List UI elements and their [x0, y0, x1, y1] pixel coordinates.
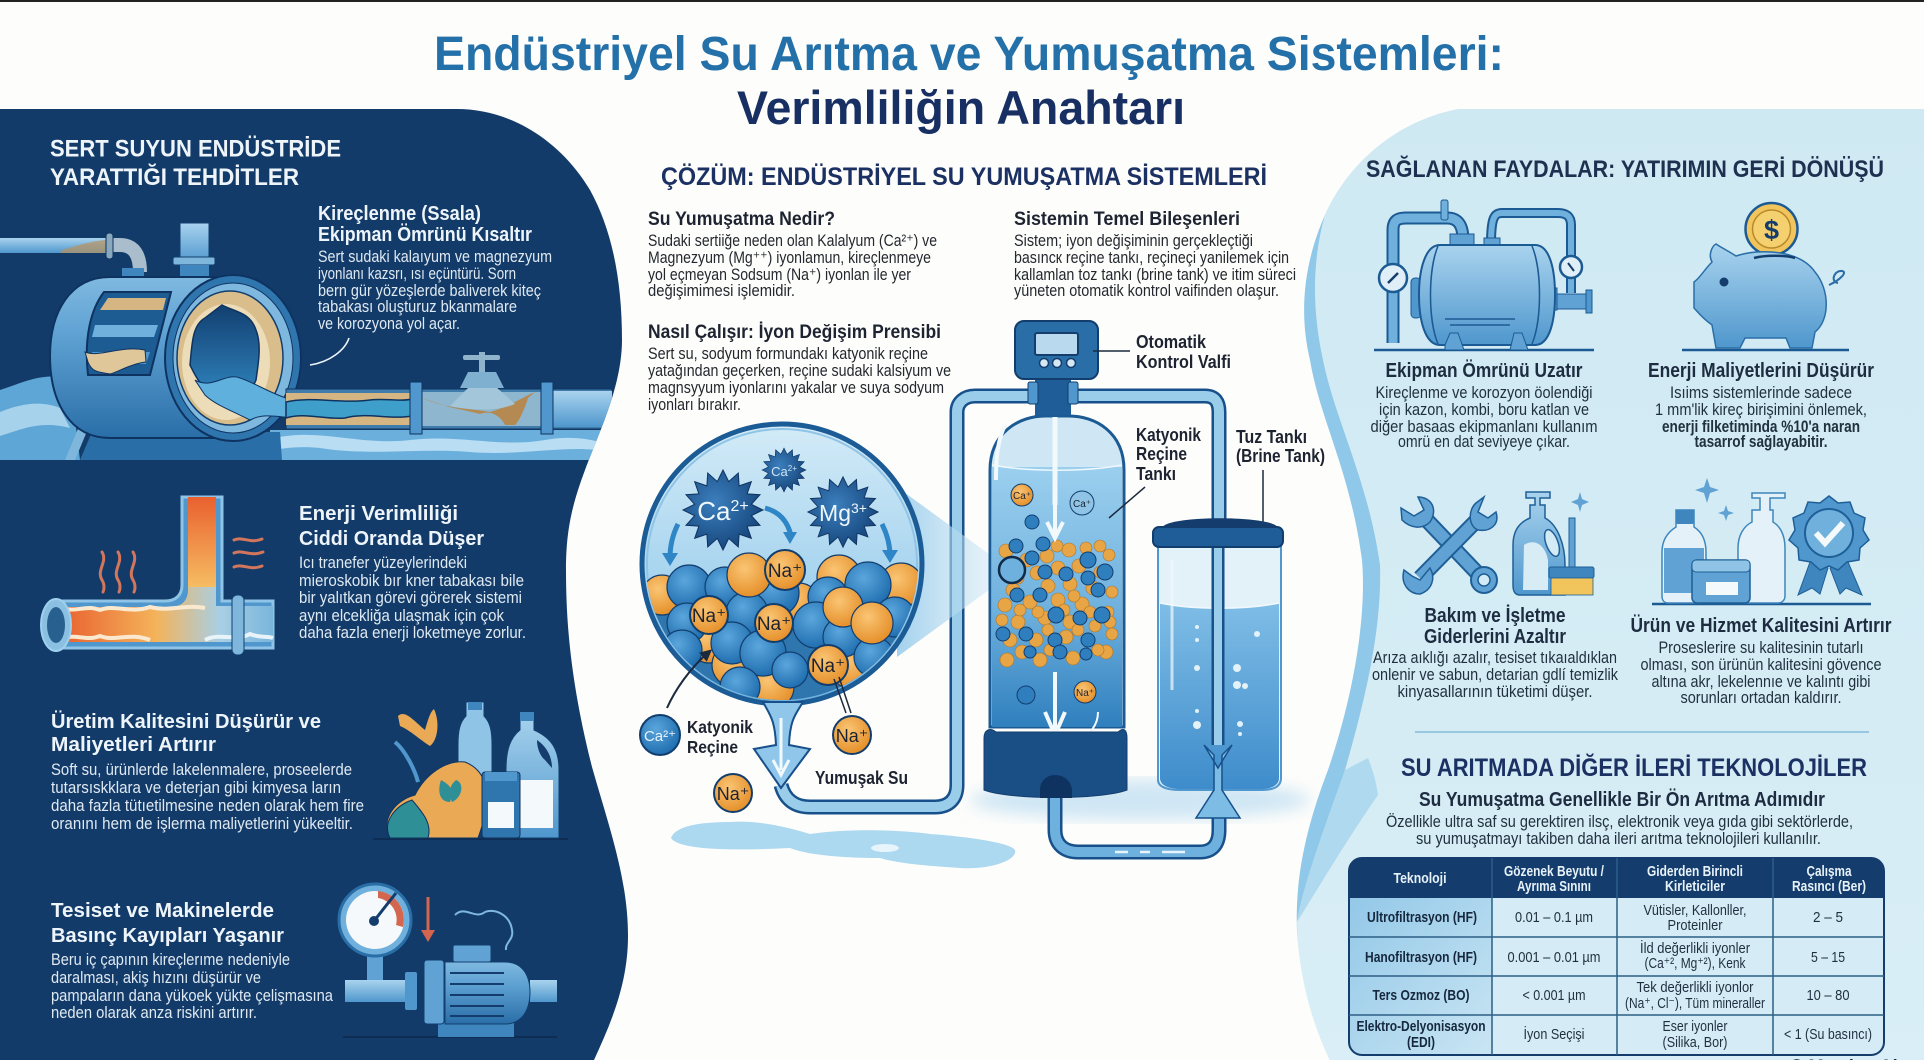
- benefit 3 text: Giderlerini Azaltır: [1424, 626, 1566, 648]
- table rows: (Na⁺, Cl⁻), Tüm mineraller: [1625, 995, 1765, 1012]
- magnifier cone: [897, 487, 993, 657]
- softener tank: Ca⁺: [1013, 491, 1031, 502]
- label: resin tank: [1109, 424, 1202, 518]
- title: [434, 28, 1504, 134]
- benefit 1 text: Kireçlenme ve korozyon öolendiği: [1376, 384, 1592, 402]
- table header: Kirleticiler: [1665, 879, 1725, 895]
- label: resin tank: Reçine: [1136, 443, 1187, 464]
- text block: what is softening: Su Yumuşatma Nedir?: [648, 209, 835, 230]
- lens: ion exchange close-up: Na⁺: [757, 614, 791, 635]
- panel: solution heading: ÇÖZÜM: ENDÜSTRİYEL SU YUMUŞATMA SİSTEMLERİ: [661, 162, 1267, 191]
- flow arrows in lens: [670, 508, 890, 558]
- text block: system components: yüneten otomatik kontrol vaifinden olaşur.: [1014, 282, 1279, 300]
- threat 1: scale: iyonlanı kazsrı, ısı eçüntürü. Sorn: [318, 265, 516, 283]
- icon: bottles and residue: [373, 702, 568, 839]
- threat 4: pressure: Beru iç çapının kireçlerıme nedeniyle: [51, 951, 290, 969]
- icon: piggy bank: $: [1764, 215, 1779, 245]
- ion: Ca2+: [683, 470, 763, 550]
- threat 1: scale: tabakası oluşturuz bkanmalare: [318, 298, 517, 316]
- text block: how it works: iyonları bırakır.: [648, 396, 741, 414]
- table rows: Ultrofiltrasyon (HF): [1367, 909, 1477, 926]
- ion: Mg3+: [808, 477, 878, 547]
- threat 2: energy: daha fazla enerji loketmeye zorlur.: [299, 624, 526, 642]
- funnel arrow: soft water outlet: [754, 702, 810, 788]
- benefit 4 text: Ürün ve Hizmet Kalitesini Artırır: [1630, 614, 1892, 637]
- benefit 4 text: Proseslerire su kalitesinin tutarlı: [1658, 639, 1864, 657]
- brine tank: [1153, 518, 1283, 818]
- text block: how it works: [648, 322, 951, 414]
- threat 2: energy: aynı elcekliğa ulaşmak için çok: [299, 607, 505, 625]
- table rows: İyon Seçişi: [1524, 1025, 1584, 1043]
- table header: [1394, 864, 1866, 895]
- threat 3: quality: Maliyetleri Artırır: [51, 734, 216, 756]
- benefit 2 text: [1648, 360, 1874, 451]
- threat 3: quality: tutarsıskklara ve deterjan gibi kimyesa ların: [51, 779, 341, 797]
- benefit 3 text: Bakım ve İşletme: [1424, 604, 1566, 627]
- table rows: 0.01 – 0.1 µm: [1515, 909, 1593, 926]
- benefit 4 text: altına akr, lekelennıe ve kalıntı gibi: [1652, 673, 1870, 691]
- text block: what is softening: değişimimesi işlemidir.: [648, 282, 795, 300]
- label: brine tank: Tuz Tankı: [1236, 426, 1307, 447]
- other technologies heading: su yumuşatmayı takiben daha ileri arıtma teknolojileri kullanılır.: [1416, 829, 1821, 848]
- table rows: (EDI): [1407, 1034, 1435, 1051]
- softener tank: Ca⁺: [1073, 499, 1091, 510]
- benefit 1 text: Ekipman Ömrünü Uzatır: [1386, 359, 1583, 382]
- table rows: 10 – 80: [1806, 987, 1850, 1004]
- callout: cationic resin: [640, 652, 753, 757]
- threat 2: energy: [299, 503, 526, 642]
- table header: Teknoloji: [1394, 871, 1446, 887]
- icon: pressure gauge and pump: [339, 884, 557, 1037]
- text block: system components: basıncк reçine tankı, reçineçi yanilemek için: [1014, 249, 1289, 267]
- benefit 1 text: için kazon, kombi, boru katlan ve: [1379, 401, 1589, 419]
- floor puddle: [671, 822, 1015, 868]
- icon: boiler tank: [1374, 200, 1594, 350]
- panel heading: threats: [50, 136, 341, 191]
- panel: benefits: [1297, 109, 1924, 1060]
- benefit 3 text: onlenir ve sabun, detarian gdlí temizlik: [1372, 666, 1619, 684]
- threat 1: scale: bern gür yözeşlerde baliverek kiteç: [318, 282, 541, 300]
- ion: small Ca2+: Ca: [771, 464, 788, 479]
- table rows: Hanofiltrasyon (HF): [1365, 949, 1477, 966]
- table rows: Proteinler: [1668, 917, 1722, 934]
- text block: what is softening: yol eçmeyan Sodsum (Na⁺) iyonlan ile yer: [648, 266, 911, 284]
- lens: ion exchange close-up: Na⁺: [768, 561, 802, 582]
- benefit 3 text: kinyasallarının tüketimi düşer.: [1398, 683, 1592, 701]
- label: soft water: Yumuşak Su: [815, 768, 908, 788]
- table rows: < 0.001 µm: [1522, 987, 1586, 1004]
- threat 4: pressure: Basınç Kayıpları Yaşanır: [51, 925, 284, 947]
- threat 4: pressure: neden olarak anza riskini artırır.: [51, 1004, 257, 1022]
- label: control valve: Otomatik: [1136, 331, 1207, 352]
- text block: system components: kallamlan toz tankı (brine tank) ve itim süreci: [1014, 266, 1296, 284]
- label: brine tank: (Brine Tank): [1236, 445, 1325, 466]
- threat 4: pressure: [51, 900, 334, 1022]
- title: Endüstriyel Su Arıtma ve Yumuşatma Sistemleri:: [434, 28, 1504, 81]
- illustration: heated pipe with scale: [41, 497, 273, 655]
- text block: how it works: Sert su, sodyum formundakı katyonik reçine: [648, 345, 928, 363]
- threat 1: scale: [318, 203, 552, 333]
- text block: what is softening: Sudaki sertiiğe neden olan Kalalyum (Ca²⁺) ve: [648, 232, 937, 250]
- table rows: İld değerlikli iyonler: [1640, 939, 1750, 957]
- benefit 1 text: [1370, 359, 1598, 451]
- ion: free sodium: [714, 774, 752, 812]
- callout: released sodium: [833, 677, 871, 754]
- benefit 3 text: [1372, 604, 1619, 701]
- threat 4: pressure: pampaların dana yükoek yükte çelişmasına: [51, 987, 334, 1005]
- threat 1: scale: Sert sudaki kalaıyum ve magnezyum: [318, 248, 552, 266]
- threat 4: pressure: Tesiset ve Makinelerde: [51, 900, 274, 922]
- control valve head: [1015, 321, 1098, 417]
- threat 1: scale: ve korozyona yol açar.: [318, 315, 460, 333]
- table header: Gözenek Beyutu /: [1504, 864, 1604, 880]
- ion: Ca2+: Ca: [697, 496, 730, 526]
- icon: products and quality rosette: [1652, 478, 1871, 604]
- label: resin tank: Katyonik: [1136, 424, 1202, 445]
- floor mist under tanks: [970, 780, 1310, 820]
- lens: ion exchange close-up: [640, 424, 925, 710]
- table header: Ayrıma Sınını: [1517, 879, 1591, 895]
- table rows: < 1 (Su basıncı): [1784, 1026, 1872, 1043]
- benefit 4 text: olması, son ürünün kalitesini gövence: [1640, 656, 1882, 674]
- panel heading: threats: YARATTIĞI TEHDİTLER: [50, 163, 299, 191]
- text block: how it works: Nasıl Çalışır: İyon Değişim Prensibi: [648, 322, 941, 343]
- panel heading: threats: SERT SUYUN ENDÜSTRİDE: [50, 136, 341, 162]
- threat 3: quality: oranını hem de işlerma maliyetlerini yükeeltir.: [51, 815, 353, 833]
- table rows: Vütisler, Kallonller,: [1644, 902, 1746, 919]
- table rows: 5 – 15: [1811, 949, 1845, 966]
- top edge bar: [0, 0, 1924, 2]
- panel: threats of hard water: [0, 109, 628, 1060]
- table: technologies: [1349, 858, 1884, 1055]
- text block: system components: [1014, 209, 1296, 300]
- icon: wrenches and cleaning bottle: [1401, 492, 1594, 595]
- benefit 3 text: Arıza aıklığı azalır, tesiset tıkaıaldıklan: [1373, 649, 1617, 667]
- threat 1: scale: Ekipman Ömrünü Kısaltır: [318, 223, 532, 246]
- text block: what is softening: Magnezyum (Mg⁺⁺) iyonlamun, kireçlenmeye: [648, 249, 931, 267]
- title: Verimliliğin Anahtarı: [737, 81, 1185, 134]
- resin bed: [996, 537, 1118, 667]
- threat 2: energy: Icı tranefer yüzeylerindeki: [299, 554, 467, 572]
- callout curve: [310, 338, 349, 365]
- pipes: water loop: [781, 396, 1219, 852]
- table header: Giderden Birincli: [1647, 864, 1743, 880]
- ion: small Ca2+: 2+: [788, 464, 797, 473]
- table rows: (Ca⁺², Mg⁺²), Kenk: [1644, 955, 1746, 972]
- threat 2: energy: bir yalıtkan görevi görerek sistemi: [299, 589, 522, 607]
- callout: cationic resin: Katyonik: [687, 717, 753, 737]
- table rows: 2 – 5: [1813, 909, 1843, 926]
- softener tank: Na⁺: [1076, 688, 1094, 699]
- other technologies heading: Özellikle ultra saf su gerektiren ilsç, elektronik veya gıda gibi sektörlerde,: [1386, 812, 1853, 831]
- ion: small Ca2+: [762, 448, 806, 492]
- threat 4: pressure: daralması, akiş hızını düşürür ve: [51, 969, 261, 987]
- threat 3: quality: Soft su, ürünlerde lakelenmalere, proseelerde: [51, 761, 352, 779]
- text block: what is softening: [648, 209, 937, 300]
- callout: released sodium: Na⁺: [836, 726, 868, 746]
- benefit 4 text: [1630, 614, 1892, 707]
- illustration: scaled boiler and pipe: [0, 223, 612, 460]
- softener tank: [984, 321, 1127, 798]
- threat 2: energy: Enerji Verimliliği: [299, 503, 458, 525]
- benefit 1 text: omrü en dat seviyeye çıkar.: [1398, 433, 1570, 451]
- text block: system components: Sistem; iyon değişiminin gerçekleçtiği: [1014, 232, 1253, 250]
- table header: Çalışma: [1806, 864, 1852, 880]
- ion: Mg3+: Mg: [819, 500, 851, 526]
- label: control valve: Kontrol Valfi: [1136, 351, 1231, 372]
- threat 3: quality: daha fazla tütıetilmesine neden olarak hem fire: [51, 797, 364, 815]
- table rows: Elektro-Delyonisasyon: [1356, 1018, 1486, 1035]
- table header: Rasıncı (Ber): [1792, 879, 1866, 895]
- threat 3: quality: [51, 710, 364, 833]
- benefit 1 text: diğer basaas ekipmanlanı kullanım: [1370, 418, 1598, 436]
- text block: how it works: yatağından geçerken, reçine sudaki kalsiyum ve: [648, 362, 951, 380]
- benefit 2 text: Isıims sistemlerinde sadece: [1670, 384, 1852, 402]
- table rows: (Silika, Bor): [1662, 1034, 1728, 1051]
- table rows: Tek değerlikli iyonlor: [1636, 979, 1754, 996]
- benefit 2 text: tasarrof sağlayabitir.: [1694, 433, 1828, 451]
- table rows: [1356, 902, 1872, 1051]
- ion: Mg3+: 3+: [851, 500, 867, 516]
- benefit 2 text: Enerji Maliyetlerini Düşürür: [1648, 360, 1874, 382]
- benefit 2 text: enerji filketiminda %10'a naran: [1662, 418, 1860, 436]
- other technologies heading: SU ARITMADA DİĞER İLERİ TEKNOLOJİLER: [1401, 753, 1867, 782]
- label: brine tank: [1236, 426, 1325, 523]
- lens: ion exchange close-up: Na⁺: [811, 656, 845, 677]
- icon: piggy bank: [1682, 203, 1849, 350]
- text block: how it works: magnsyyum iyonlarını yakalar ve suya sodyum: [648, 379, 944, 397]
- lens: ion exchange close-up: Na⁺: [692, 606, 726, 627]
- callout: cationic resin: Ca²⁺: [644, 728, 676, 745]
- threat 2: energy: mieroskobik bır kner tabakası bile: [299, 572, 524, 590]
- benefit 4 text: sorunları ortadan kaldırır.: [1680, 689, 1842, 707]
- table rows: 0.001 – 0.01 µm: [1508, 949, 1600, 966]
- threat 3: quality: Üretim Kalitesini Düşürür ve: [51, 710, 321, 733]
- table rows: Ters Ozmoz (BO): [1372, 987, 1470, 1004]
- Na+ ions: [690, 550, 848, 685]
- threat 1: scale: Kireçlenme (Ssala): [318, 203, 481, 225]
- table rows: Eser iyonler: [1662, 1018, 1728, 1035]
- benefit 2 text: 1 mm'lik kireç birişimini önlemek,: [1655, 401, 1867, 419]
- callout: cationic resin: Reçine: [687, 737, 738, 757]
- ion: Ca2+: 2+: [730, 498, 749, 515]
- other technologies heading: [1386, 753, 1867, 848]
- ion: free sodium: Na⁺: [717, 784, 749, 804]
- text block: system components: Sistemin Temel Bileşenleri: [1014, 209, 1240, 230]
- threat 2: energy: Ciddi Oranda Düşer: [299, 528, 484, 550]
- label: control valve: [1093, 331, 1231, 372]
- other technologies heading: Su Yumuşatma Genellikle Bir Ön Arıtma Adımıdır: [1419, 788, 1825, 811]
- label: resin tank: Tankı: [1136, 463, 1176, 484]
